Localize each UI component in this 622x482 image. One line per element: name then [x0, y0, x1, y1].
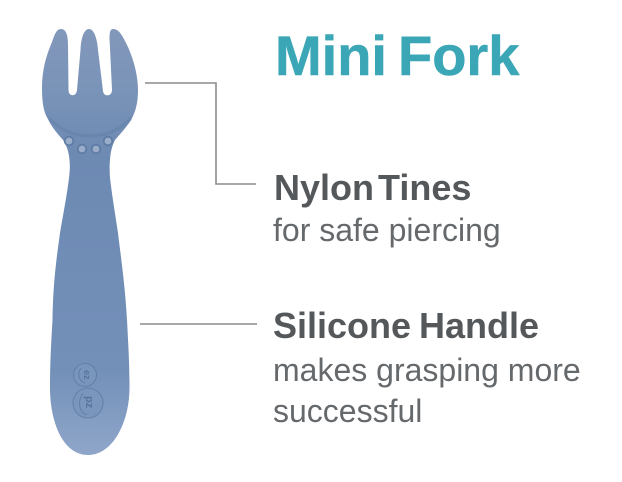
- text: handle description: makes grasping more: [273, 352, 581, 388]
- heading: nylon tines: Nylon: [274, 167, 374, 208]
- leader line: tines: [145, 83, 256, 184]
- logo text: [82, 370, 95, 409]
- heading: silicone handle: Handle: [419, 305, 539, 346]
- fork body: [42, 29, 138, 455]
- heading: nylon tines: Tines: [378, 167, 471, 208]
- icon: fork: [42, 29, 138, 455]
- title: Mini: [275, 24, 387, 87]
- text: for safe piercing: for safe piercing: [273, 212, 501, 248]
- logo text: pz: [83, 396, 95, 409]
- leader line: handle: [140, 323, 257, 325]
- bumps: [65, 137, 112, 153]
- logo emboss: [73, 364, 103, 418]
- spoon crease: [49, 118, 131, 136]
- title: Fork: [398, 24, 520, 87]
- heading: silicone handle: Silicone: [273, 305, 411, 346]
- text: handle description: successful: [273, 393, 422, 429]
- text: handle description: [273, 352, 581, 429]
- logo text: ez: [82, 370, 92, 380]
